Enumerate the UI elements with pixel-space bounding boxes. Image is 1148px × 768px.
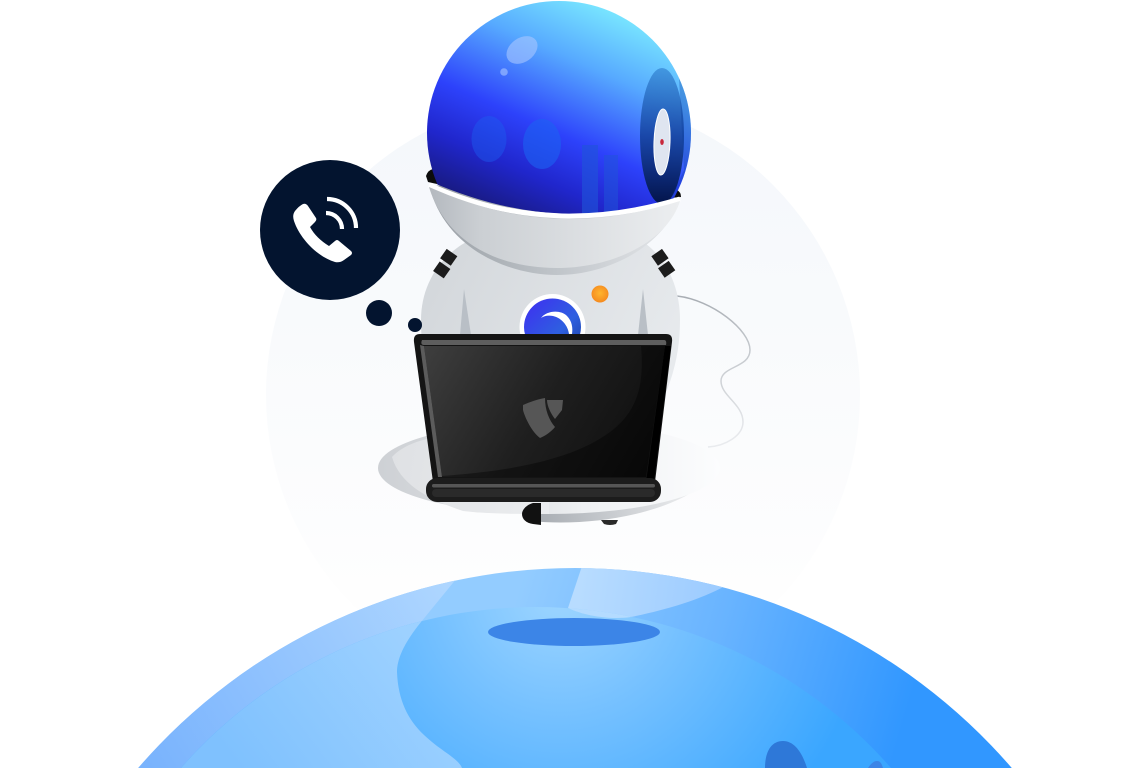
- screen: [424, 346, 665, 477]
- side window: [653, 109, 671, 175]
- seat disk: [378, 422, 720, 522]
- crater: dark spot small: [868, 761, 883, 768]
- eye right: [523, 119, 561, 169]
- top highlight: [421, 340, 666, 345]
- shoulder patches right: [651, 249, 675, 278]
- logo: [523, 398, 563, 438]
- helmet: [427, 1, 691, 219]
- orange button: [592, 286, 608, 302]
- chest badge: [520, 294, 586, 334]
- collar shadow: [429, 185, 680, 275]
- body: [421, 240, 680, 400]
- background circle: [266, 98, 860, 692]
- astronaut: [421, 1, 700, 400]
- planet: [138, 566, 1012, 768]
- laptop lid: [414, 334, 672, 482]
- disk inner left: [392, 438, 549, 514]
- bubble main: [260, 160, 400, 300]
- bubble mid: [366, 300, 392, 326]
- collar bowl: [429, 187, 680, 268]
- laptop base: [426, 478, 661, 502]
- screen glare: [442, 346, 665, 477]
- arm folds: [460, 289, 471, 335]
- base band: [432, 489, 655, 497]
- arm fold right: [638, 289, 648, 335]
- disk top: [378, 422, 720, 514]
- thought bubble: [260, 160, 422, 332]
- continent: left light mass: [138, 578, 462, 768]
- right edge band: [646, 346, 671, 482]
- crater: dark spot large: [765, 741, 807, 768]
- eye left: [472, 116, 506, 162]
- laptop: [414, 334, 672, 502]
- reflection small: [500, 68, 508, 76]
- reflection large: [501, 30, 543, 70]
- black collar end right: [670, 190, 681, 198]
- illustration: astronaut on planet: [138, 1, 1012, 768]
- leg left: [522, 503, 541, 525]
- left highlight: [420, 345, 442, 477]
- icon: phone: [293, 199, 356, 262]
- cable: [677, 296, 750, 447]
- red dot: [660, 139, 664, 145]
- disk shadow band: [530, 468, 720, 522]
- base highlight: [432, 484, 655, 488]
- black collar ends: [426, 169, 446, 186]
- bubble small: [408, 318, 422, 332]
- continent: top light patch: [568, 566, 725, 618]
- helmet white rim: [429, 185, 680, 216]
- foot right: [601, 520, 618, 525]
- crater: shadow ellipse: [488, 618, 660, 646]
- side visor: [640, 68, 691, 202]
- inner planet glow: [181, 600, 891, 768]
- visor strips: [582, 145, 598, 220]
- shoulder patches left: [433, 249, 457, 278]
